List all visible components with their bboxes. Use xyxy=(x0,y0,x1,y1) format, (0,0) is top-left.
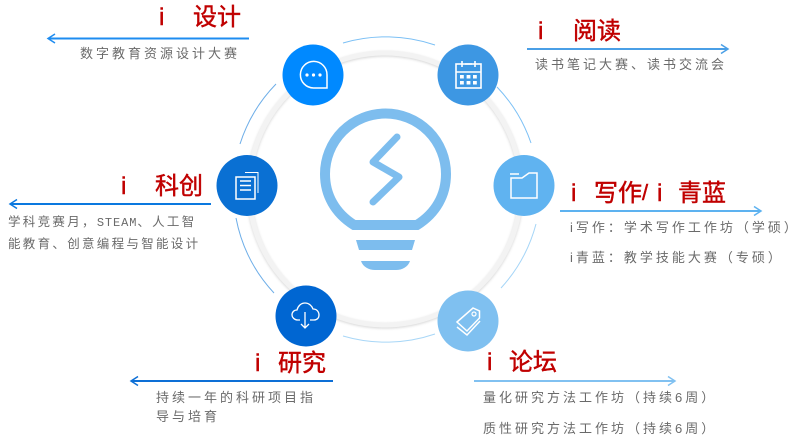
icon: calendar xyxy=(438,44,498,106)
icon: folder xyxy=(494,155,554,216)
arrow: 写作 xyxy=(560,206,761,216)
grey ring xyxy=(249,53,521,326)
text: 设计 description: 数字教育资源设计大赛 xyxy=(80,46,240,61)
text: 研究 description: 持续一年的科研项目指 xyxy=(156,390,316,405)
icon: light bulb xyxy=(325,113,446,270)
heading: i 阅读: i xyxy=(538,18,543,45)
arrow: 设计 xyxy=(48,34,249,43)
heading: i 写作/i 青蓝 xyxy=(571,180,726,207)
text: 论坛 line 1: 量化研究方法工作坊（持续6周） xyxy=(483,390,717,405)
heading: i 研究: 研究 xyxy=(278,350,326,377)
text: i写作 description: i写作：学术写作工作坊（学硕） xyxy=(570,220,799,235)
heading: i 论坛: 论坛 xyxy=(509,349,557,376)
heading: i 论坛 xyxy=(487,349,557,376)
arrow: 论坛 xyxy=(474,376,675,386)
text: 科创 description xyxy=(8,215,200,251)
heading: i 研究: i xyxy=(255,350,260,377)
heading: i 设计 xyxy=(159,4,241,31)
arrow: 阅读 xyxy=(527,44,728,54)
text: i青蓝 description: i青蓝：教学技能大赛（专硕） xyxy=(570,250,784,265)
heading: i 科创: 科创 xyxy=(155,173,203,200)
icon: documents xyxy=(216,155,278,216)
heading: i 科创 xyxy=(121,173,203,200)
heading: i 写作/i 青蓝: 青蓝 xyxy=(678,180,726,207)
heading: i 论坛: i xyxy=(487,349,492,376)
text: 阅读 description: 读书笔记大赛、读书交流会 xyxy=(535,57,727,72)
icon: chat bubble xyxy=(282,44,344,106)
thin outer arcs xyxy=(236,37,536,342)
heading: i 写作/i 青蓝: / xyxy=(642,180,648,205)
text: 科创 description: 能教育、创意编程与智能设计 xyxy=(8,237,200,251)
arrow: 科创 xyxy=(10,200,211,208)
icon: price tags xyxy=(438,290,498,352)
heading: i 研究 xyxy=(255,350,326,377)
heading: i 写作/i 青蓝: i xyxy=(571,180,576,207)
heading: i 写作/i 青蓝: 写作 xyxy=(594,180,642,207)
arrow: 研究 xyxy=(131,376,333,386)
text: 科创 description: 学科竞赛月，STEAM、人工智 xyxy=(8,215,197,230)
heading: i 设计: 设计 xyxy=(193,4,241,31)
text: 研究 description: 导与培育 xyxy=(156,409,220,424)
heading: i 写作/i 青蓝: i xyxy=(657,180,662,207)
text: 研究 description xyxy=(156,390,316,424)
text: 论坛 line 2: 质性研究方法工作坊（持续6周） xyxy=(483,421,717,436)
heading: i 科创: i xyxy=(121,173,126,200)
heading: i 设计: i xyxy=(159,4,164,31)
icon: cloud download xyxy=(276,286,336,346)
heading: i 阅读: 阅读 xyxy=(573,18,621,45)
heading: i 阅读 xyxy=(538,18,621,45)
